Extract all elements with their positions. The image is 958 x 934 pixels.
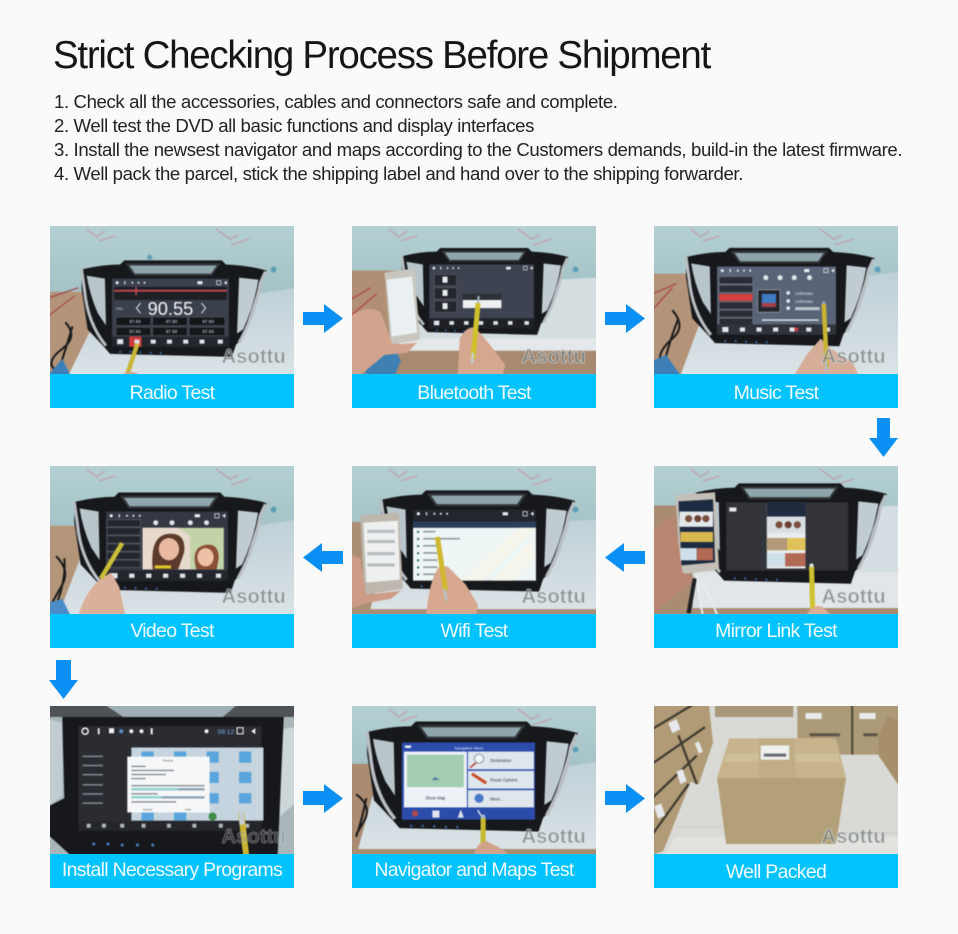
watermark: Asottu — [821, 346, 886, 368]
caption: Video Test — [130, 620, 214, 642]
watermark: Asottu — [521, 586, 586, 608]
photo: radio test: 87.50 — [129, 329, 141, 334]
arrow: radio to bluetooth — [303, 304, 343, 333]
arrow: install to navigator — [303, 784, 343, 813]
arrow: bluetooth to music — [605, 304, 645, 333]
arrow: navigator to well packed — [605, 784, 645, 813]
photo: navigator and maps: Route Options — [490, 778, 517, 783]
photo: navigator and maps: Destination — [490, 758, 512, 763]
caption — [654, 374, 898, 408]
photo: radio test — [50, 226, 294, 374]
arrow: mirror link to wifi — [605, 543, 645, 572]
text block: checklist: 1. Check all the accessories, cables and connectors safe and complete. — [54, 91, 618, 112]
cardboard box — [717, 738, 846, 844]
dialog — [127, 757, 210, 813]
caption — [352, 854, 596, 888]
photo: install programs — [50, 706, 294, 854]
dialog: Hide — [185, 807, 192, 811]
text block: checklist — [54, 91, 902, 184]
watermark: Asottu — [521, 826, 586, 848]
caption: Music Test — [734, 382, 818, 404]
text block: checklist: 2. Well test the DVD all basic functions and display interfaces — [54, 115, 534, 136]
photo: navigator and maps: Show Map — [425, 795, 446, 800]
dialog: Cancel — [143, 807, 153, 811]
photo: radio test: 87.50 — [202, 329, 214, 334]
dialog: Pasting — [163, 759, 173, 763]
caption: Navigator and Maps Test — [374, 859, 574, 881]
arrow: video down to install — [49, 660, 78, 699]
caption — [654, 614, 898, 648]
title: Strict Checking Process Before Shipment — [53, 34, 710, 77]
photo: wifi test — [352, 466, 596, 614]
panel: mirror link test — [654, 466, 898, 648]
caption: Bluetooth Test — [417, 382, 531, 404]
photo: radio test: 87.50 — [166, 319, 178, 324]
watermark: Asottu — [221, 346, 286, 368]
watermark: Asottu — [221, 826, 286, 848]
watermark: Asottu — [521, 346, 586, 368]
panel: navigator and maps test — [352, 706, 596, 888]
panel: install necessary programs — [50, 706, 294, 888]
photo: install programs: 09:12 — [218, 729, 235, 736]
text block: checklist: 4. Well pack the parcel, stick the shipping label and hand over to the shipping forwarder. — [54, 163, 743, 184]
caption — [50, 854, 294, 888]
photo: well packed — [654, 706, 898, 854]
panel: video test — [50, 466, 294, 648]
photo: radio test: 87.50 — [129, 319, 141, 324]
caption — [50, 374, 294, 408]
panel: bluetooth test — [352, 226, 596, 408]
caption — [352, 374, 596, 408]
caption: Install Necessary Programs — [62, 859, 282, 881]
arrow: wifi to video — [303, 543, 343, 572]
caption — [654, 854, 898, 888]
panel: wifi test — [352, 466, 596, 648]
photo: video test — [50, 466, 294, 614]
photo: navigator and maps: More... — [490, 796, 503, 801]
caption — [50, 614, 294, 648]
panel: music test — [654, 226, 898, 408]
photo: radio test: 87.50 — [166, 329, 178, 334]
text block: checklist: 3. Install the newsest navigator and maps according to the Customers demands, build-in the latest firmware. — [54, 139, 902, 160]
caption — [352, 614, 596, 648]
watermark: Asottu — [221, 586, 286, 608]
photo: radio test: 87.50 — [202, 319, 214, 324]
photo: navigator and maps: Navigation Menu — [454, 747, 483, 751]
caption: Radio Test — [130, 382, 214, 404]
photo: radio test: FM1 — [116, 307, 123, 311]
photo: music test: Unknown — [795, 299, 814, 304]
photo: music test — [654, 226, 898, 374]
caption: Wifi Test — [440, 620, 508, 642]
panel: radio test — [50, 226, 294, 408]
caption: Mirror Link Test — [715, 620, 837, 642]
arrow: music down to mirror link — [869, 418, 898, 457]
photo: navigator and maps — [352, 706, 596, 854]
watermark: Asottu — [821, 826, 886, 848]
photo: music test: Unknown — [795, 291, 814, 296]
watermark: Asottu — [821, 586, 886, 608]
photo: radio test: 90.55 — [148, 298, 193, 319]
caption: Well Packed — [726, 861, 826, 883]
photo: bluetooth test — [352, 226, 596, 374]
panel: well packed — [654, 706, 898, 888]
photo: mirror link test — [654, 466, 898, 614]
